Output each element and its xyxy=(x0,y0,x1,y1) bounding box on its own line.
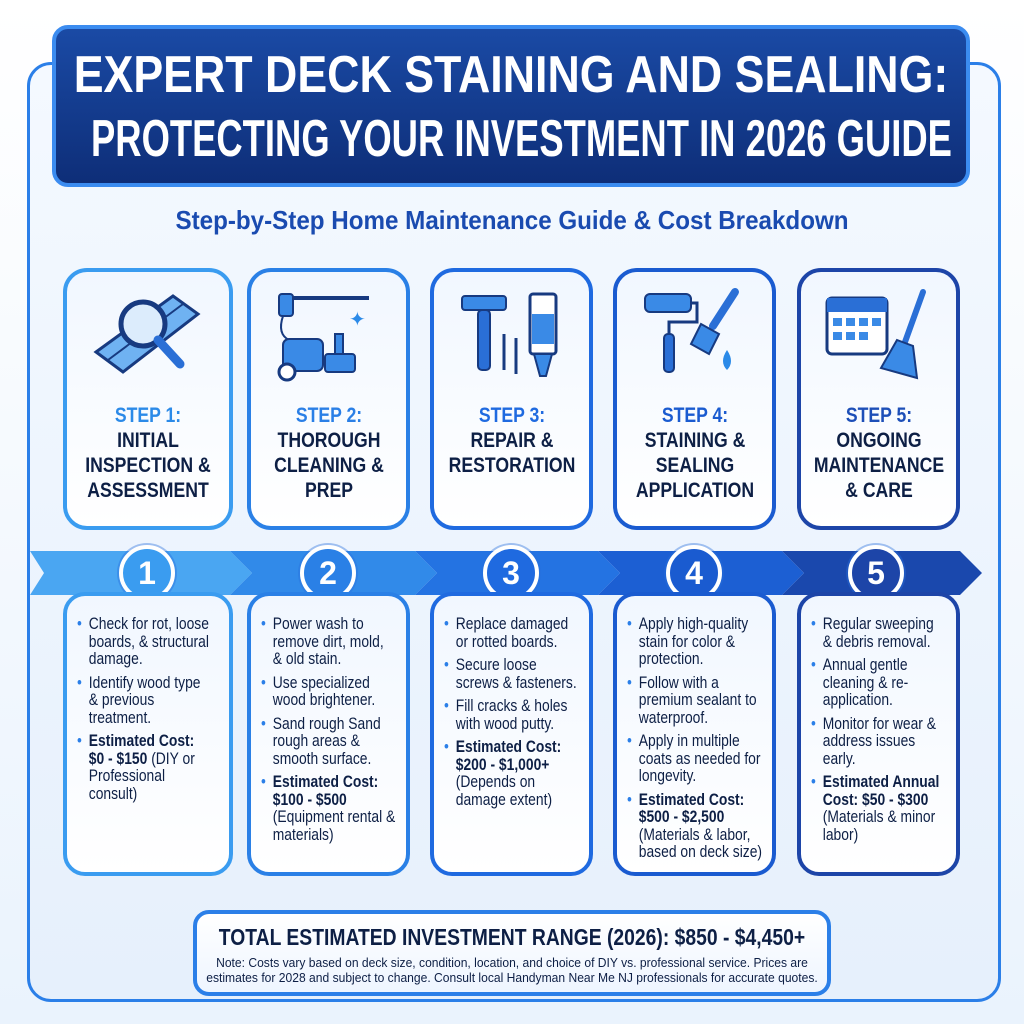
panel: step 4 details: Estimated Cost: $500 - $2,500 (Materials & labor, based on deck size) xyxy=(639,790,762,861)
panel: step 1 details xyxy=(63,592,233,876)
panel: step 1 top xyxy=(63,268,233,530)
heading: step 1: INSPECTION & xyxy=(85,454,211,477)
panel: step 1 top: STEP 1: xyxy=(115,404,181,427)
panel: step 2 details xyxy=(247,592,410,876)
panel: step 2 details: Use specialized wood brightener. xyxy=(273,674,375,709)
callout: total investment xyxy=(193,910,831,996)
icon: roller and brush xyxy=(644,288,739,373)
icon: calendar and broom xyxy=(826,289,926,380)
panel: step 3 details: Replace damaged or rotted boards. xyxy=(456,615,568,650)
panel: step 5 details xyxy=(797,592,960,876)
title: PROTECTING YOUR INVESTMENT IN 2026 GUIDE xyxy=(91,110,952,168)
icon: pressure washer xyxy=(278,293,369,382)
panel: step 2 top: STEP 2: xyxy=(295,404,362,427)
heading: step 5: ONGOING xyxy=(836,429,921,452)
callout: total investment: TOTAL ESTIMATED INVESTMENT RANGE (2026): $850 - $4,450+ xyxy=(219,924,805,950)
heading: step 2: THOROUGH xyxy=(277,429,380,452)
heading: step 4 xyxy=(635,429,754,502)
heading: step 4: SEALING xyxy=(655,454,734,477)
number circle 1: 1 xyxy=(138,555,156,591)
panel: step 4 top: STEP 4: xyxy=(661,404,728,427)
heading: step 5: & CARE xyxy=(845,479,912,502)
heading: step 3: REPAIR & xyxy=(470,429,553,452)
panel: step 3 top: STEP 3: xyxy=(478,404,545,427)
panel: step 5 details: Annual gentle cleaning & re-application. xyxy=(823,656,908,709)
panel: step 1 details: Check for rot, loose boards, & structural damage. xyxy=(89,615,209,668)
panel: step 2 details: Estimated Cost: $100 - $500 (Equipment rental & materials) xyxy=(273,773,395,844)
panel: step 4 details: Follow with a premium sealant to waterproof. xyxy=(639,674,757,726)
panel: step 3 details: Fill cracks & holes with wood putty. xyxy=(456,697,567,732)
panel: step 3 details: Secure loose screws & fasteners. xyxy=(456,656,577,692)
heading: step 3: RESTORATION xyxy=(448,454,575,477)
panel: step 3 details: Estimated Cost: $200 - $1,000+ (Depends on damage extent) xyxy=(456,738,561,808)
arrow band xyxy=(30,551,982,595)
heading: step 2: PREP xyxy=(304,479,353,502)
heading: step 4: STAINING & xyxy=(644,429,745,452)
heading: step 5 xyxy=(813,429,944,502)
number circle 3 xyxy=(483,545,539,601)
icon: hammer and putty xyxy=(461,292,558,377)
callout: total investment: Note: Costs vary based on deck size, condition, location, and choice of DIY vs. professional service. Prices are xyxy=(216,955,808,970)
number circle 4: 4 xyxy=(685,555,703,591)
panel: step 5 details: Regular sweeping & debris removal. xyxy=(823,615,934,650)
heading: step 1: INITIAL xyxy=(117,429,179,452)
number circle 4 xyxy=(666,545,722,601)
panel: step 5 details: Monitor for wear & address issues early. xyxy=(823,714,936,768)
title xyxy=(52,25,970,187)
panel: step 2 details: Power wash to remove dirt, mold, & old stain. xyxy=(273,615,384,668)
panel: step 4 details: Apply high-quality stain for color & protection. xyxy=(639,615,748,668)
panel: step 4 details xyxy=(613,592,776,876)
heading: step 5: MAINTENANCE xyxy=(813,454,944,477)
icon: pressure washer: ✦ xyxy=(348,309,365,331)
heading: step 2: CLEANING & xyxy=(274,454,383,477)
subtitle: Step-by-Step Home Maintenance Guide & Cost Breakdown xyxy=(175,205,849,235)
panel: step 2 top xyxy=(247,268,410,530)
number circle 5 xyxy=(848,545,904,601)
icon: magnifier on plank xyxy=(94,294,200,374)
heading: step 2 xyxy=(274,429,384,502)
panel: step 1 details: Identify wood type & previous treatment. xyxy=(89,674,200,726)
number circle 3: 3 xyxy=(502,555,520,591)
panel: step 2 details: Sand rough Sand rough areas & smooth surface. xyxy=(273,714,381,768)
heading: step 1: ASSESSMENT xyxy=(87,479,209,502)
panel: step 5 top: STEP 5: xyxy=(845,404,912,427)
heading: step 4: APPLICATION xyxy=(635,479,754,502)
heading: step 1 xyxy=(85,429,211,502)
panel: step 5 top xyxy=(797,268,960,530)
panel: step 4 details: Apply in multiple coats as needed for longevity. xyxy=(639,732,761,785)
panel: step 1 details: Estimated Cost: $0 - $150 (DIY or Professional consult) xyxy=(89,732,195,802)
number circle 5: 5 xyxy=(867,555,885,591)
panel: step 4 top xyxy=(613,268,776,530)
number circle 2 xyxy=(300,545,356,601)
number circle 2: 2 xyxy=(319,555,337,591)
panel: step 5 details: Estimated Annual Cost: $50 - $300 (Materials & minor labor) xyxy=(823,773,939,844)
heading: step 3 xyxy=(448,429,575,477)
panel: step 3 top xyxy=(430,268,593,530)
callout: total investment: estimates for 2028 and subject to change. Consult local Handyman Near Me NJ professionals for accurate quotes. xyxy=(206,970,818,985)
title: EXPERT DECK STAINING AND SEALING: xyxy=(74,46,948,104)
panel: step 3 details xyxy=(430,592,593,876)
number circle 1 xyxy=(119,545,175,601)
